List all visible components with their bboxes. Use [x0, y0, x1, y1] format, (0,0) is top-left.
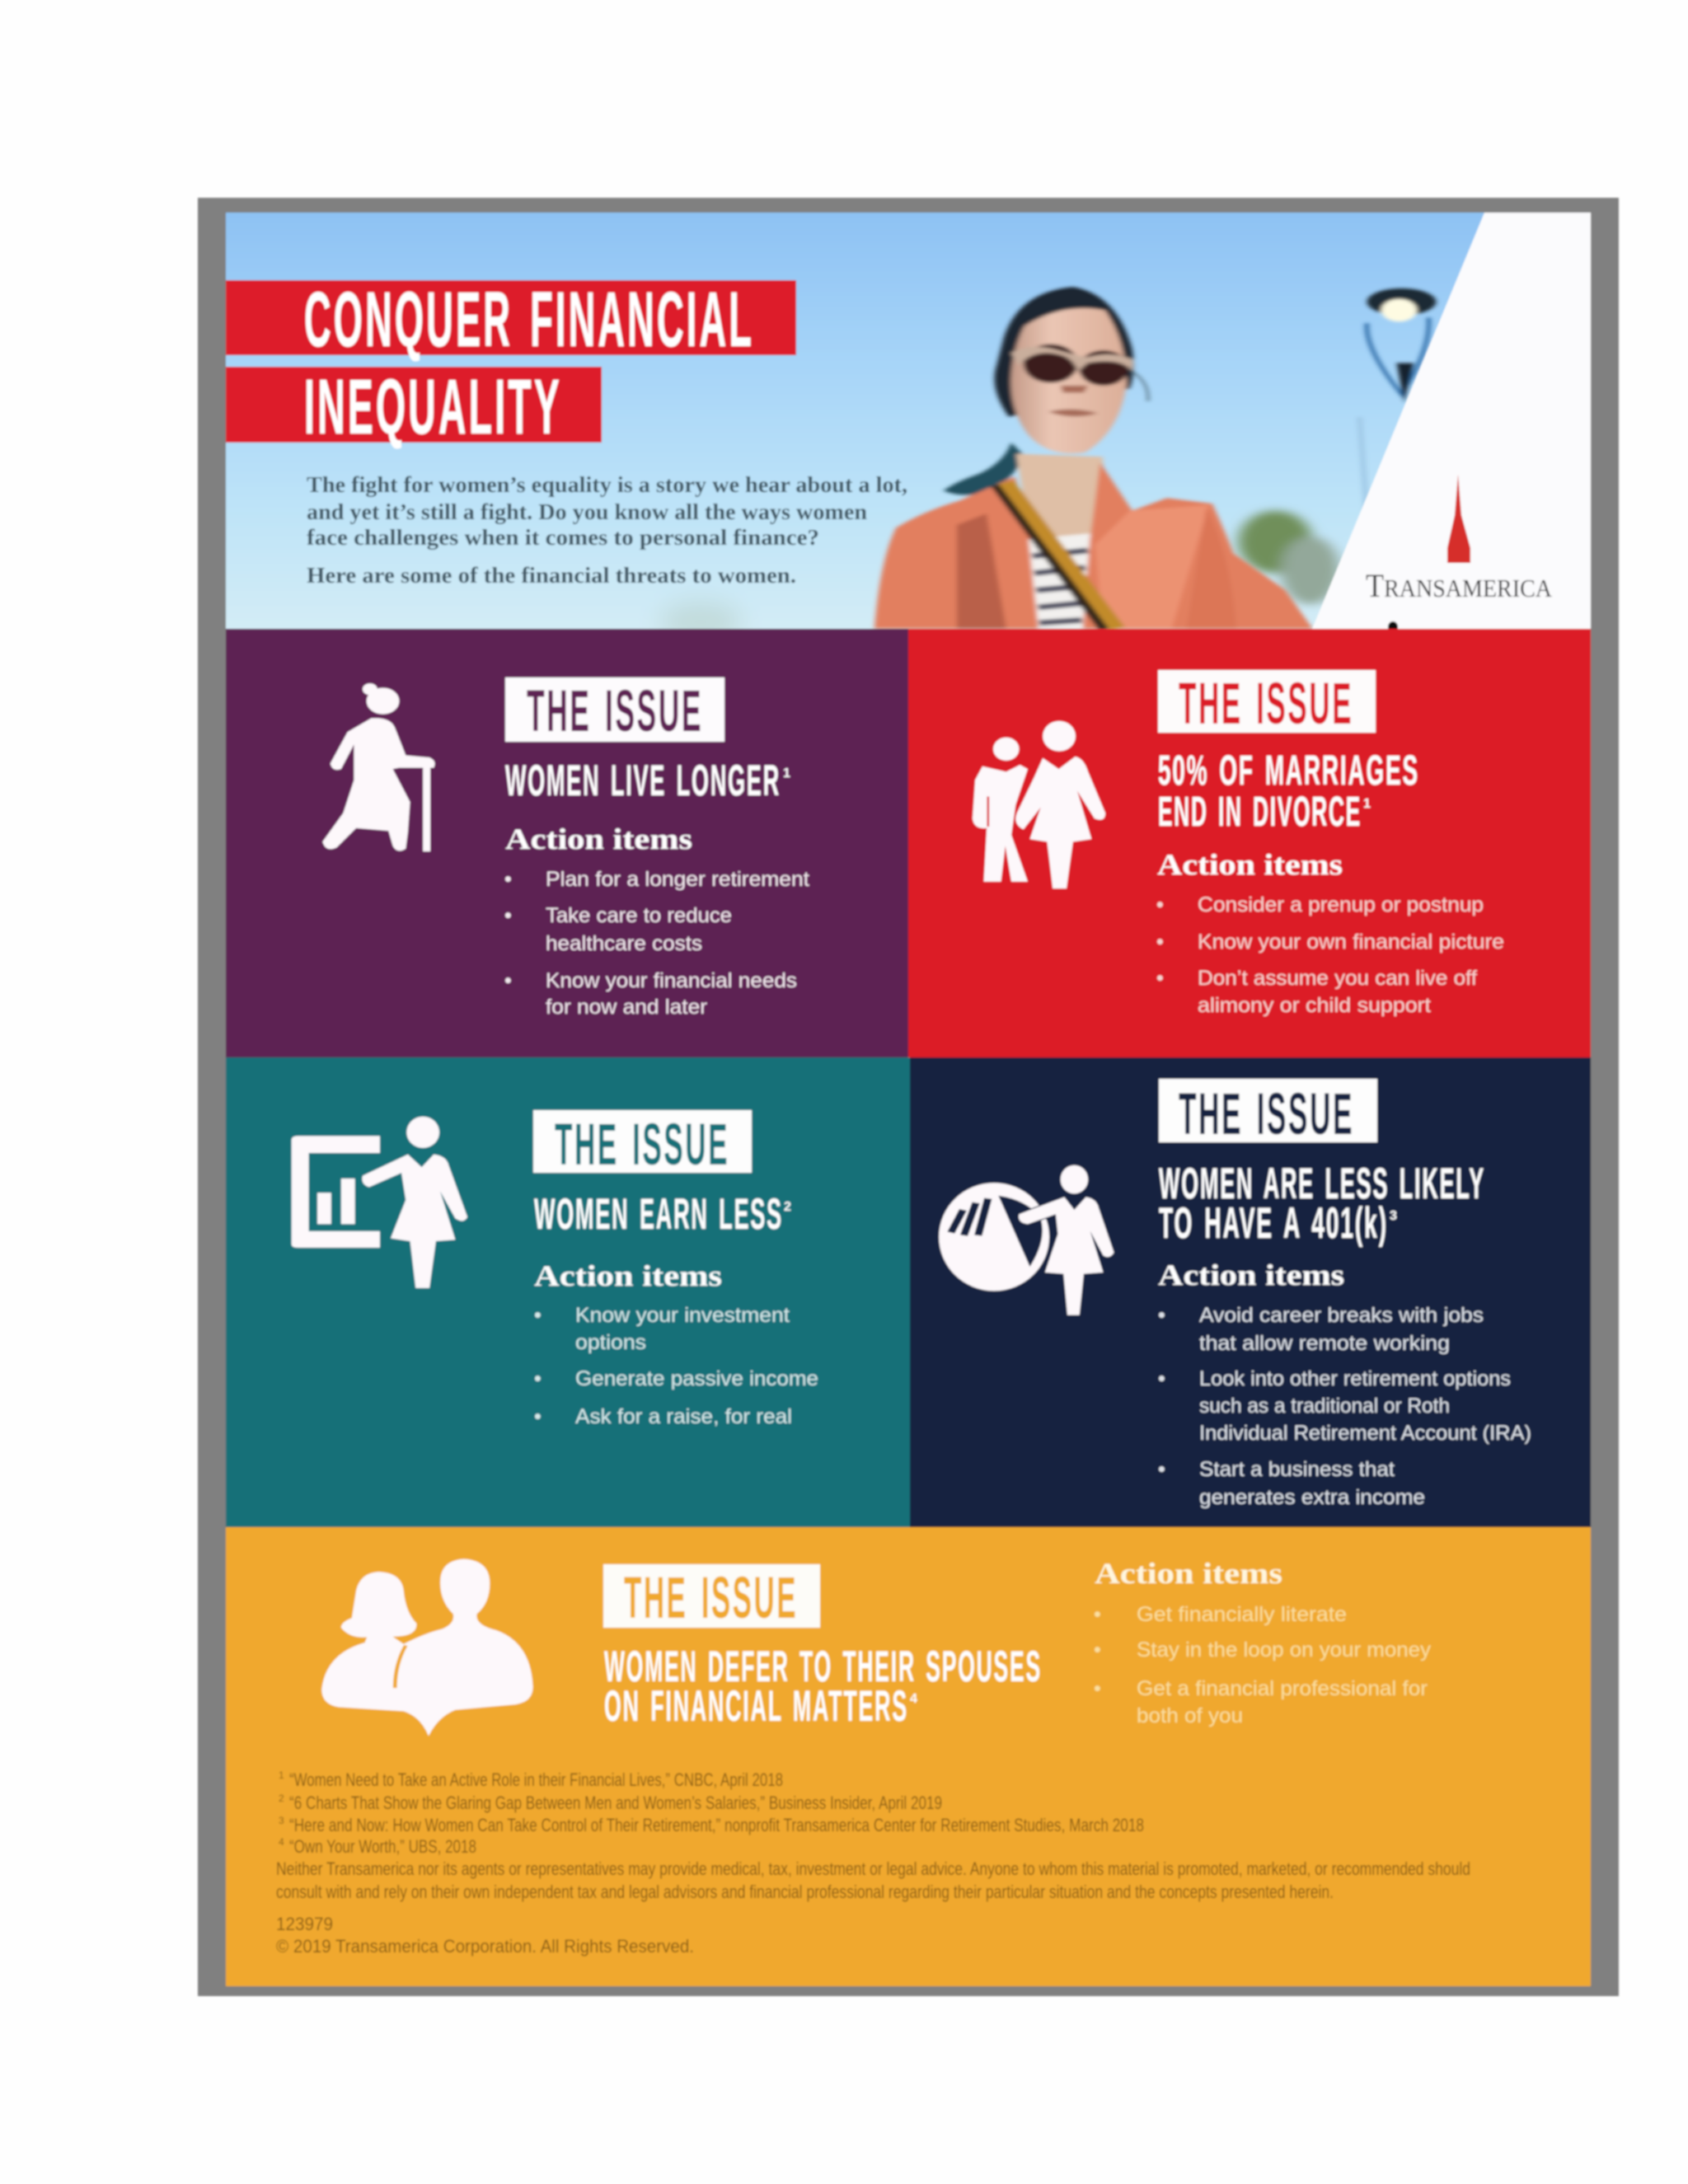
action items: • [504, 868, 512, 891]
action items: • [534, 1367, 542, 1390]
action items: for now and later [546, 996, 707, 1019]
badge: the issue [1159, 1079, 1377, 1147]
action items [534, 1259, 818, 1428]
icon: two person silhouettes [321, 1559, 533, 1736]
badge: the issue [533, 1110, 752, 1178]
badge: the issue [1158, 670, 1376, 737]
action items: • [1156, 893, 1164, 916]
action items: Action items [1095, 1557, 1282, 1590]
action items: • [1094, 1603, 1101, 1626]
action items: Look into other retirement options [1199, 1367, 1511, 1390]
heading: WOMEN EARN LESS [534, 1190, 783, 1239]
action items: • [504, 904, 512, 927]
action items: Plan for a longer retirement [546, 868, 809, 891]
footnotes and disclosures: “Here and Now: How Women Can Take Control of Their Retirement,” nonprofit Transamerica Center for Retirement Studies, March 2018 [289, 1815, 1144, 1835]
title banner line 1 [226, 276, 796, 363]
action items: Get a financial professional for [1137, 1677, 1428, 1700]
icon: presenter with bar chart [292, 1117, 467, 1288]
action items: Know your financial needs [546, 969, 797, 992]
panel: women defer to their spouses [226, 1527, 1591, 1986]
footnotes and disclosures: “Women Need to Take an Active Role in their Financial Lives,” CNBC, April 2018 [289, 1769, 783, 1790]
logo: Transamerica [1366, 475, 1553, 604]
badge: the issue: THE ISSUE [555, 1113, 729, 1178]
heading [534, 1190, 791, 1239]
blurred foliage behind the intro [659, 598, 742, 630]
action items: Generate passive income [575, 1367, 818, 1390]
badge: the issue: THE ISSUE [1179, 1082, 1354, 1147]
footnotes and disclosures: “6 Charts That Show the Glaring Gap Between Men and Women’s Salaries,” Business Insider, April 2019 [289, 1793, 942, 1813]
intro text: face challenges when it comes to personal finance? [307, 525, 819, 550]
action items: Take care to reduce [546, 904, 732, 927]
title banner line 2: INEQUALITY [304, 363, 562, 451]
action items: • [534, 1304, 542, 1327]
action items: Action items [1157, 848, 1343, 881]
footnotes and disclosures: 4 [279, 1836, 284, 1848]
infographic page [196, 196, 1620, 1998]
footnotes and disclosures [276, 1769, 1470, 1957]
footnotes and disclosures: consult with and rely on their own independent tax and legal advisors and financial professional regarding their particular situation and the concepts presented herein. [276, 1882, 1334, 1902]
action items [1156, 848, 1504, 1017]
action items: • [1158, 1458, 1165, 1481]
panel: women defer to their spouses: WOMEN DEFER TO THEIR SPOUSES [604, 1643, 1042, 1691]
action items: generates extra income [1199, 1486, 1425, 1509]
action items [504, 823, 809, 1019]
heading: END IN DIVORCE [1158, 788, 1362, 835]
action items: Individual Retirement Account (IRA) [1199, 1422, 1531, 1445]
icon: elderly woman with cane [322, 683, 435, 851]
title banner line 2 [226, 363, 602, 451]
street lamp [1357, 285, 1440, 504]
grey page frame [198, 198, 1619, 1996]
action items: such as a traditional or Roth [1199, 1394, 1450, 1418]
intro text: Here are some of the financial threats to women. [307, 563, 796, 588]
action items: • [1094, 1638, 1101, 1661]
heading: TO HAVE A 401(k) [1159, 1199, 1388, 1248]
action items: that allow remote working [1199, 1332, 1450, 1355]
action items: alimony or child support [1198, 994, 1431, 1017]
action items: Get financially literate [1137, 1603, 1347, 1626]
action items: Action items [505, 823, 692, 855]
heading: 50% OF MARRIAGES [1158, 747, 1419, 794]
action items: Action items [534, 1259, 722, 1292]
action items: Know your own financial picture [1198, 930, 1504, 954]
action items: Consider a prenup or postnup [1198, 893, 1484, 916]
panel: divorce [908, 629, 1591, 1057]
action items: Ask for a raise, for real [575, 1405, 792, 1428]
footnotes and disclosures: © 2019 Transamerica Corporation. All Rights Reserved. [276, 1936, 694, 1957]
footnotes and disclosures: 1 [279, 1769, 284, 1781]
intro text: The fight for women’s equality is a story we hear about a lot, [307, 472, 907, 497]
heading: 3 [1390, 1209, 1397, 1223]
photo: woman in coral coat with street lamp [874, 287, 1436, 629]
heading: 1 [1363, 797, 1371, 811]
title banner line 1: CONQUER FINANCIAL [304, 276, 754, 363]
heading [1158, 747, 1419, 835]
footnotes and disclosures: “Own Your Worth,” UBS, 2018 [289, 1836, 476, 1857]
action items: Action items [1158, 1258, 1344, 1291]
action items: Don’t assume you can live off [1198, 967, 1477, 990]
panel: less likely to have a 401(k) [910, 1057, 1591, 1527]
heading [1159, 1160, 1485, 1248]
footnotes and disclosures: 2 [279, 1793, 284, 1804]
action items [1158, 1258, 1531, 1509]
heading: ON FINANCIAL MATTERS [604, 1682, 908, 1731]
icon: couple [973, 721, 1105, 888]
intro text: and yet it’s still a fight. Do you know all the ways women [307, 499, 867, 524]
intro text [307, 472, 907, 588]
action items: Know your investment [575, 1304, 790, 1327]
badge: the issue [505, 677, 724, 744]
action items: Start a business that [1199, 1458, 1395, 1481]
action items: healthcare costs [546, 932, 702, 955]
action items [1094, 1557, 1432, 1727]
badge: the issue: THE ISSUE [624, 1566, 798, 1631]
heading: WOMEN LIVE LONGER [505, 757, 781, 805]
action items: • [1156, 930, 1164, 954]
action items: • [1156, 967, 1164, 990]
icon: presenter with pie chart [939, 1165, 1114, 1315]
action items: Stay in the loop on your money [1137, 1638, 1432, 1661]
logo: Transamerica: TRANSAMERICA [1366, 567, 1553, 604]
action items: options [575, 1331, 646, 1354]
black speck on hero edge [1388, 621, 1398, 633]
action items: • [1094, 1677, 1101, 1700]
action items: • [534, 1405, 542, 1428]
footnotes and disclosures: 3 [279, 1815, 284, 1826]
panel: hero photo [226, 213, 1591, 643]
badge: the issue: THE ISSUE [527, 679, 703, 744]
action items: both of you [1137, 1704, 1243, 1727]
badge: the issue [603, 1564, 820, 1631]
action items: • [1158, 1304, 1165, 1327]
white logo wedge [1312, 213, 1591, 629]
footnotes and disclosures: 123979 [276, 1914, 333, 1934]
heading: 1 [783, 766, 790, 780]
background tree [1239, 511, 1339, 604]
action items: • [1158, 1367, 1165, 1390]
heading: 2 [784, 1200, 791, 1214]
heading [505, 757, 790, 805]
heading: 4 [910, 1692, 917, 1706]
action items: • [504, 969, 512, 992]
action items: Avoid career breaks with jobs [1199, 1304, 1484, 1327]
panel: women earn less [226, 1057, 910, 1527]
panel: women live longer [226, 629, 908, 1057]
heading [604, 1643, 1042, 1731]
badge: the issue: THE ISSUE [1179, 672, 1353, 737]
woman figure [874, 287, 1313, 629]
